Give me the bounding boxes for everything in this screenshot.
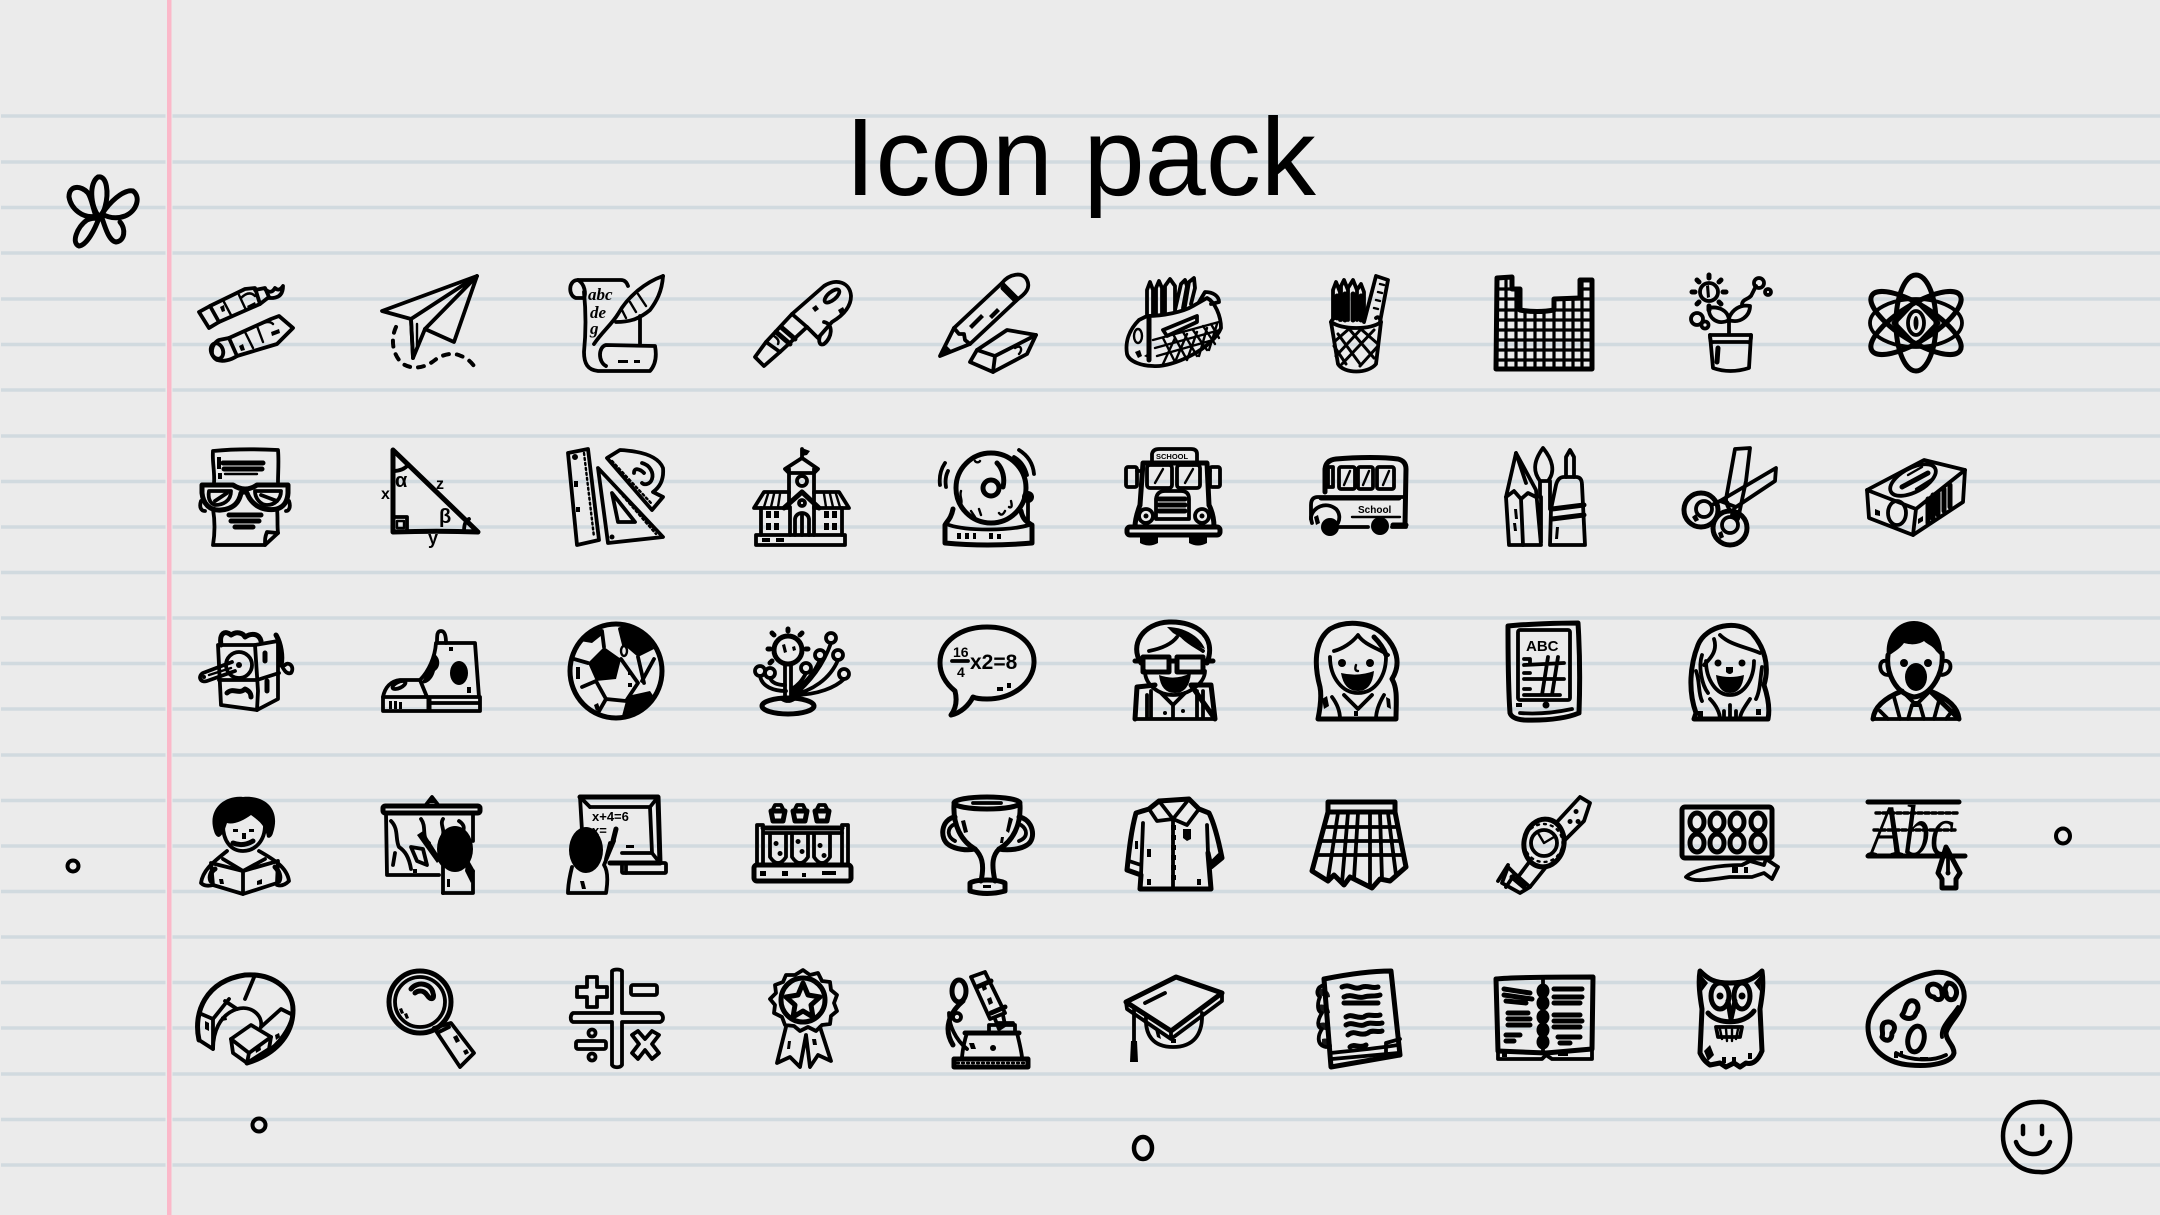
doodle: dot right — [2056, 828, 2070, 844]
icon: soccer ball — [570, 624, 662, 718]
icon: math speech bubble: 16 — [953, 644, 969, 660]
icon: child at blackboard — [568, 797, 666, 893]
icon: school bus side: School — [1358, 505, 1392, 516]
icon: award rosette — [770, 970, 837, 1067]
icon: child at blackboard: x+4=6 — [592, 809, 629, 824]
icon: tablet — [1508, 623, 1580, 720]
icon: child at blackboard: x= — [592, 823, 607, 838]
icon: paper plane — [382, 276, 477, 367]
icon: boy with glasses — [1135, 622, 1215, 719]
icon: school building — [754, 448, 849, 545]
icon: math speech bubble — [940, 627, 1034, 715]
doodle: dot bottom centre — [1134, 1137, 1152, 1159]
icon: right triangle — [381, 450, 478, 548]
icon: pie chart — [198, 975, 293, 1063]
icon: pencil case — [1126, 278, 1221, 366]
icon: man with tie — [1873, 621, 1959, 719]
icon: school bus front — [1126, 449, 1220, 546]
icon: paint tubes — [199, 286, 293, 361]
icon: boy reading — [201, 797, 289, 894]
icon: school bell — [940, 450, 1034, 545]
icon: right triangle: y — [428, 528, 438, 548]
icon: watercolour box — [1682, 807, 1778, 880]
doodle: smiley — [2003, 1102, 2070, 1172]
icon: spiral notebook — [1317, 971, 1400, 1067]
icon: right triangle: β — [439, 506, 451, 528]
icon: right triangle: x — [381, 486, 390, 503]
icon: microscope — [948, 972, 1028, 1067]
icon: atom — [1862, 275, 1970, 371]
icon grid — [198, 275, 1970, 1067]
icon: highlighter — [755, 282, 851, 366]
icon: notes with glasses — [200, 449, 290, 545]
icon: rulers and set square — [568, 449, 663, 545]
icon: scroll and quill: g — [589, 319, 599, 338]
icon: paint palette — [1868, 972, 1964, 1066]
doodle: flower — [69, 177, 137, 246]
icon: pencil sharpener machine — [200, 633, 292, 710]
icon: graduation cap — [1126, 977, 1222, 1062]
icon: scissors — [1684, 448, 1776, 545]
icon: math speech bubble: x2=8 — [970, 651, 1018, 674]
icon: pencil and eraser — [940, 275, 1036, 372]
icon: sharpener — [1867, 458, 1965, 535]
icon: plant with sun — [1691, 275, 1771, 371]
icon: open book — [1496, 977, 1593, 1059]
icon: calligraphy: Abc — [1867, 791, 1954, 871]
icon: scroll and quill: abc — [588, 285, 613, 304]
doodle: dot left — [68, 860, 78, 872]
icon: girl — [1316, 623, 1397, 719]
icon: periodic table — [1496, 277, 1592, 369]
icon: school bus side — [1311, 458, 1406, 536]
title: Icon pack — [845, 96, 1317, 219]
icon: magnifying glass — [389, 971, 474, 1067]
icon: right triangle: z — [436, 476, 444, 493]
icon: pleated skirt — [1312, 802, 1406, 888]
icon: math operators — [571, 970, 663, 1067]
icon: long-sleeve shirt — [1127, 799, 1222, 889]
icon: teacher with map — [383, 797, 480, 895]
icon: scroll and quill — [570, 276, 663, 371]
icon: calligraphy — [1867, 791, 1965, 888]
icon: pencil, brush and glue — [1506, 448, 1585, 545]
icon: test tube rack — [754, 805, 851, 881]
icon: tablet: ABC — [1526, 638, 1559, 655]
icon: trophy — [943, 797, 1033, 894]
icon: wrist watch — [1498, 797, 1590, 893]
icon: owl — [1699, 971, 1763, 1067]
icon: pencil cup — [1331, 276, 1388, 372]
icon: math speech bubble: 4 — [957, 664, 965, 680]
icon: right triangle: α — [395, 470, 408, 492]
doodle: dot bottom left — [252, 1118, 266, 1132]
icon: school bus front: SCHOOL — [1156, 452, 1189, 461]
icon: science plant model — [755, 629, 849, 714]
icon: woman — [1691, 625, 1769, 719]
icon: sneaker — [383, 631, 480, 711]
icon: scroll and quill: de — [590, 303, 606, 322]
